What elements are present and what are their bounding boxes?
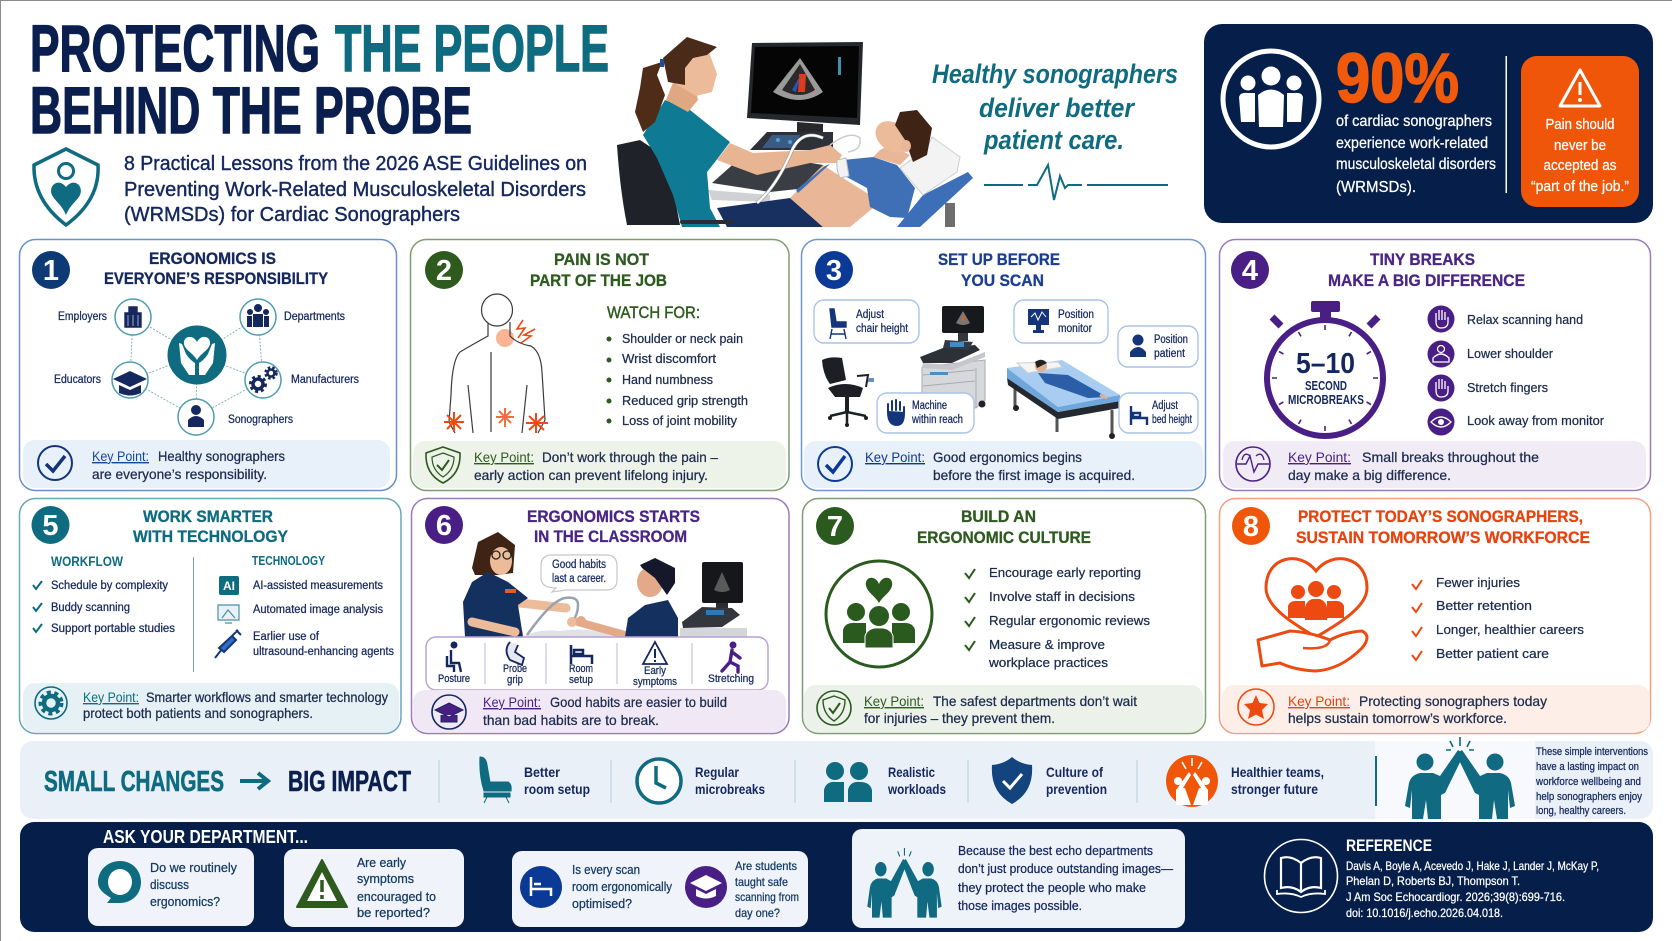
technology column: Automated image analysis: [253, 604, 383, 616]
callout: position patient: [1118, 326, 1198, 367]
title: THE PEOPLE: [335, 11, 609, 85]
microbreak list: Stretch fingers: [1467, 380, 1548, 395]
callout: pain warning: never be: [1554, 137, 1606, 154]
key point: Good ergonomics begins: [933, 449, 1082, 465]
panel 7: build an ergonomic culture: [802, 498, 1206, 734]
icon: open book: [1264, 840, 1338, 912]
icon: bed: [520, 866, 562, 908]
title: [30, 11, 609, 147]
culture checklist: Involve staff in decisions: [989, 589, 1136, 604]
item: healthier teams: [1166, 755, 1324, 807]
question card: early symptoms: Are early: [357, 855, 406, 870]
key point: [23, 440, 390, 488]
panel 5: work smarter with technology: [20, 498, 401, 734]
ultrasound monitor: [747, 42, 863, 136]
heading: [1296, 507, 1590, 547]
question card: early symptoms: encouraged to: [357, 889, 436, 904]
heading: SET UP BEFORE: [938, 250, 1060, 269]
icon: high five: [867, 848, 942, 918]
badge 2: 2: [436, 255, 452, 287]
illustration: student: [567, 558, 678, 637]
reference citation: [1346, 836, 1599, 920]
callout: pain warning: accepted as: [1544, 157, 1616, 174]
reference citation: Davis A, Boyle A, Acevedo J, Hake J, Lander J, McKay P,: [1346, 859, 1599, 873]
technology column: Earlier use of: [253, 631, 320, 643]
badge 5: 5: [42, 510, 59, 542]
heading: [530, 250, 667, 290]
statistic description: [1336, 113, 1496, 196]
stakeholder network: [23, 299, 390, 488]
heading: PROTECT TODAY’S SONOGRAPHERS,: [1298, 507, 1583, 526]
icon: departments: [247, 304, 269, 327]
key point: Key Point:: [865, 449, 925, 465]
callout: pain warning: [1521, 56, 1639, 207]
question card: scan room and students: scanning from: [735, 890, 799, 904]
key point: [413, 690, 786, 732]
skill strip: setup: [569, 674, 593, 686]
icon: graduation cap: [685, 866, 727, 908]
badge 4: 4: [1242, 255, 1258, 287]
panel 2: pain is not part of the job: [410, 240, 789, 490]
illustration: ultrasound machine: [920, 306, 986, 408]
heading: MAKE A BIG DIFFERENCE: [1328, 271, 1525, 290]
illustration: high five: [1405, 737, 1515, 819]
tagline: deliver better: [979, 93, 1135, 123]
subtitle: (WRMSDs) for Cardiac Sonographers: [124, 204, 460, 226]
technology column: AI: [223, 579, 235, 593]
table and probe cable: [522, 598, 615, 637]
callout: position patient: patient: [1154, 348, 1186, 360]
callout: position monitor: Position: [1058, 309, 1094, 321]
watch for list: Shoulder or neck pain: [622, 331, 743, 346]
reference citation: doi: 10.1016/j.echo.2026.04.018.: [1346, 906, 1503, 920]
speech bubble: Good habits: [552, 559, 606, 571]
illustration: teacher: [463, 532, 566, 637]
icon: probe grip: [506, 642, 524, 665]
question card: early symptoms: symptoms: [357, 871, 414, 886]
skill strip: grip: [507, 674, 523, 686]
key point: Key Point:: [864, 693, 924, 709]
ECG line: [984, 165, 1168, 200]
skill strip: [426, 637, 768, 690]
question card: discuss ergonomics: discuss: [150, 877, 189, 892]
question card: scan room and students: [512, 851, 808, 927]
labels: Manufacturers: [291, 374, 359, 386]
workflow column: Schedule by complexity: [51, 580, 168, 592]
badge 8: 8: [1243, 511, 1259, 543]
bed: [897, 172, 973, 227]
benefit checklist: [1412, 575, 1585, 661]
subtitle: 8 Practical Lessons from the 2026 ASE Guidelines on: [124, 153, 587, 175]
key point: Key Point:: [92, 448, 149, 464]
callout: adjust chair height: Adjust: [856, 309, 885, 321]
panel: 90% statistic: [1204, 24, 1653, 223]
technology column: AI-assisted measurements: [253, 580, 383, 592]
skill strip: Early: [644, 665, 666, 677]
reference citation: J Am Soc Echocardiogr. 2026;39(8):699-716.: [1346, 890, 1565, 904]
badge 1: [32, 251, 70, 289]
question card: scan room and students: Is every scan: [572, 863, 640, 877]
stopwatch: MICROBREAKS: [1288, 392, 1364, 407]
microbreak list: [1428, 306, 1605, 436]
microbreak list: Look away from monitor: [1467, 413, 1605, 428]
speech bubble: [541, 555, 617, 592]
tagline: [932, 59, 1178, 155]
technology column: [215, 553, 394, 658]
icon: group of people: [1223, 51, 1319, 147]
item: better room setup: [480, 757, 590, 803]
badge 2: [425, 251, 463, 289]
skill strip: symptoms: [633, 676, 677, 688]
item: culture of prevention: [992, 757, 1107, 804]
badge 6: 6: [436, 510, 452, 542]
heading: BUILD AN: [961, 507, 1036, 526]
item: culture of prevention: prevention: [1046, 781, 1107, 797]
icon: warning triangle: [643, 642, 667, 664]
key point: are everyone’s responsibility.: [92, 466, 267, 482]
key point: Key Point:: [474, 449, 534, 465]
callout: pain warning: Pain should: [1546, 116, 1614, 133]
question card: discuss ergonomics: ergonomics?: [150, 894, 220, 909]
icon: graduation cap: [113, 371, 147, 396]
callout: position monitor: monitor: [1058, 323, 1092, 335]
key point: Key Point:: [1288, 693, 1350, 709]
benefit checklist: Better patient care: [1436, 646, 1549, 661]
item: regular microbreaks: microbreaks: [695, 781, 765, 797]
key point: The safest departments don’t wait: [933, 693, 1137, 709]
callout: machine within reach: within reach: [911, 414, 963, 426]
chair: [617, 140, 680, 225]
badge 7: 7: [827, 511, 843, 543]
item: realistic workloads: workloads: [887, 781, 946, 797]
callout: machine within reach: [877, 393, 974, 433]
statistic description: experience work-related: [1336, 135, 1488, 152]
key point: [1223, 441, 1646, 488]
banner heading: SMALL CHANGES: [44, 766, 224, 798]
microbreak list: Lower shoulder: [1467, 346, 1554, 361]
banner note: These simple interventions: [1536, 746, 1648, 758]
item: healthier teams: stronger future: [1231, 781, 1318, 797]
heading: ERGONOMICS STARTS: [527, 507, 700, 526]
heading: PART OF THE JOB: [530, 271, 667, 290]
watch for list: Reduced grip strength: [622, 393, 748, 408]
culture checklist: Regular ergonomic reviews: [989, 613, 1151, 628]
benefit checklist: Fewer injuries: [1436, 575, 1521, 590]
subtitle: Preventing Work-Related Musculoskeletal Disorders: [124, 179, 586, 201]
icon: gears: [250, 368, 276, 392]
key point: [1222, 685, 1650, 732]
labels: [54, 311, 359, 426]
key point: than bad habits are to break.: [483, 712, 659, 728]
heading: IN THE CLASSROOM: [534, 527, 687, 546]
badge 5: [32, 506, 70, 544]
workflow column: Support portable studies: [51, 623, 175, 635]
callout: adjust bed height: bed height: [1152, 414, 1193, 426]
key point: Key Point:: [1288, 449, 1351, 465]
speech bubble: last a career.: [552, 573, 606, 585]
title: BEHIND THE PROBE: [30, 73, 472, 147]
question card: early symptoms: be reported?: [357, 905, 430, 920]
title: PROTECTING: [30, 11, 320, 85]
workflow column: WORKFLOW: [51, 553, 124, 569]
panel 1: ergonomics is everyone's responsibility: [20, 240, 1653, 932]
question card: scan room and students: day one?: [735, 906, 780, 920]
illustration: office chair: [822, 357, 874, 427]
key point: Don’t work through the pain –: [542, 449, 718, 465]
heading: [1328, 250, 1525, 290]
badge 8: [1232, 507, 1270, 545]
labels: Educators: [54, 374, 101, 386]
key point: [804, 685, 1203, 732]
heading: ERGONOMIC CULTURE: [917, 528, 1091, 547]
callout: position patient: Position: [1154, 334, 1188, 346]
heading: [133, 507, 289, 546]
message card: don’t just produce outstanding images—: [958, 861, 1173, 876]
key point: Healthy sonographers: [158, 448, 285, 464]
callout: adjust chair height: [814, 300, 919, 343]
subtitle: [124, 153, 587, 226]
key point: for injuries – they prevent them.: [864, 710, 1055, 726]
culture checklist: Encourage early reporting: [989, 565, 1141, 580]
question card: scan room and students: Are students: [735, 859, 797, 873]
panel 8: protect today's sonographers: [1220, 498, 1650, 734]
heading: [527, 507, 700, 546]
item: culture of prevention: Culture of: [1046, 764, 1103, 780]
badge 3: 3: [826, 255, 842, 287]
illustration: bed with patient: [1007, 360, 1120, 439]
watch for list: Wrist discomfort: [622, 351, 716, 366]
icon: room setup: [571, 645, 592, 664]
reference citation: REFERENCE: [1346, 836, 1432, 855]
question card: discuss ergonomics: [88, 848, 254, 926]
message card: they protect the people who make: [958, 880, 1146, 895]
heading: TINY BREAKS: [1370, 250, 1475, 269]
key point: early action can prevent lifelong injury.: [474, 467, 708, 483]
heading: [938, 250, 1060, 290]
labels: Departments: [284, 311, 345, 323]
statistic description: (WRMSDs).: [1336, 179, 1416, 196]
probe and cable: [757, 135, 860, 203]
key point: day make a big difference.: [1288, 467, 1451, 483]
item: healthier teams: Healthier teams,: [1231, 764, 1324, 780]
banner heading: [44, 766, 411, 798]
culture checklist: Measure & improve: [989, 637, 1105, 652]
callout: pain warning: “part of the job.”: [1531, 178, 1629, 195]
key point: before the first image is acquired.: [933, 467, 1135, 483]
item: regular microbreaks: [637, 759, 765, 803]
heading: [917, 507, 1091, 547]
workflow column: Buddy scanning: [51, 602, 130, 614]
skill strip: Probe: [503, 663, 527, 675]
skill strip: Room: [569, 663, 593, 675]
banner note: have a lasting impact on: [1536, 761, 1639, 773]
skill strip: Stretching: [708, 673, 754, 685]
icon: heart with people on hand: [1258, 559, 1367, 671]
workflow column: [33, 553, 175, 635]
callout: adjust chair height: chair height: [856, 323, 909, 335]
key point: Key Point:: [483, 694, 541, 710]
key point: Protecting sonographers today: [1359, 693, 1547, 709]
message card: those images possible.: [958, 898, 1082, 913]
badge 6: [425, 506, 463, 544]
body with pain points: [444, 294, 548, 433]
heading: WITH TECHNOLOGY: [133, 527, 289, 546]
labels: Sonographers: [228, 414, 293, 426]
key point: Key Point:: [83, 689, 139, 705]
heading: [104, 249, 329, 288]
ultrasound console: [708, 132, 833, 202]
heading: ERGONOMICS IS: [149, 249, 276, 268]
callout: position monitor: [1014, 300, 1108, 343]
panel: ask your department and reference: [20, 822, 1653, 932]
icon: building: [124, 306, 142, 328]
icon: sonographer: [188, 405, 204, 427]
pillow: [900, 137, 960, 195]
benefit checklist: Better retention: [1436, 598, 1532, 613]
icon: shield with person and heart: [34, 149, 98, 225]
benefit checklist: Longer, healthier careers: [1436, 622, 1585, 637]
stopwatch: SECOND: [1305, 378, 1347, 393]
badge 4: [1231, 251, 1269, 289]
watch for list: Hand numbness: [622, 372, 713, 387]
heading: EVERYONE’S RESPONSIBILITY: [104, 269, 329, 288]
illustration: sonographer scanning patient: [617, 37, 973, 227]
key point: [23, 683, 399, 732]
item: regular microbreaks: Regular: [695, 764, 739, 780]
heading: WORK SMARTER: [143, 507, 273, 526]
badge 3: [815, 251, 853, 289]
statistic description: of cardiac sonographers: [1336, 113, 1492, 130]
culture checklist: workplace practices: [988, 655, 1109, 670]
question card: scan room and students: room ergonomically: [572, 880, 673, 894]
key point: protect both patients and sonographers.: [83, 705, 313, 721]
icon: posture: [447, 642, 461, 672]
key point: helps sustain tomorrow’s workforce.: [1288, 710, 1507, 726]
technology column: TECHNOLOGY: [252, 553, 325, 568]
panel 6: ergonomics starts in the classroom: [412, 498, 789, 734]
banner heading: BIG IMPACT: [288, 766, 411, 798]
question card: early symptoms: [284, 849, 464, 927]
tagline: Healthy sonographers: [932, 59, 1178, 89]
sonographer: [635, 37, 842, 227]
tagline: patient care.: [983, 125, 1124, 155]
watch for list: WATCH FOR:: [607, 303, 700, 322]
heading: PAIN IS NOT: [554, 250, 650, 269]
banner: small changes big impact: [20, 737, 1653, 819]
heading: YOU SCAN: [961, 271, 1044, 290]
heading: SUSTAIN TOMORROW’S WORKFORCE: [1296, 528, 1590, 547]
technology column: ultrasound-enhancing agents: [253, 646, 394, 658]
key point: Good habits are easier to build: [550, 694, 727, 710]
statistic description: musculoskeletal disorders: [1336, 156, 1496, 173]
badge 1: 1: [43, 255, 59, 287]
banner note: long, healthy careers.: [1536, 805, 1626, 817]
banner note: [1535, 746, 1648, 817]
item: realistic workloads: Realistic: [888, 764, 935, 780]
stopwatch: [1267, 301, 1383, 436]
watch for list: Loss of joint mobility: [622, 413, 737, 428]
callout: adjust bed height: Adjust: [1152, 400, 1179, 412]
microbreak list: Relax scanning hand: [1467, 312, 1583, 327]
question card: scan room and students: optimised?: [572, 897, 632, 911]
key point: [413, 441, 786, 488]
icon: stretching: [722, 642, 740, 672]
culture checklist: [965, 565, 1151, 670]
banner note: workforce wellbeing and: [1535, 776, 1641, 788]
question card: discuss ergonomics: Do we routinely: [150, 860, 237, 875]
item: realistic workloads: [824, 762, 946, 802]
illustration: ultrasound machine: [680, 562, 747, 637]
message card: [852, 829, 1185, 928]
labels: Employers: [58, 311, 107, 323]
key point: Smarter workflows and smarter technology: [146, 689, 388, 705]
key point: Small breaks throughout the: [1362, 449, 1539, 465]
panel 4: tiny breaks: [1220, 240, 1650, 490]
callout: adjust bed height: [1119, 393, 1198, 433]
key point: [804, 441, 1203, 488]
question card: scan room and students: taught safe: [735, 875, 788, 889]
banner note: help sonographers enjoy: [1536, 791, 1642, 803]
patient: [717, 110, 932, 227]
90 percent: 90%: [1336, 39, 1459, 117]
callout: machine within reach: Machine: [912, 400, 947, 412]
icon: team with heart: [826, 561, 932, 667]
item: better room setup: Better: [524, 764, 560, 780]
badge 7: [816, 507, 854, 545]
heading: ask your department: ASK YOUR DEPARTMENT...: [103, 827, 308, 847]
skill strip: Posture: [438, 673, 470, 685]
reference citation: Phelan D, Roberts BJ, Thompson T.: [1346, 874, 1520, 888]
item: better room setup: room setup: [524, 781, 590, 797]
watch for list: [606, 303, 748, 428]
stopwatch: 5–10: [1296, 348, 1355, 380]
panel 3: set up before you scan: [802, 240, 1206, 490]
message card: Because the best echo departments: [958, 843, 1153, 858]
